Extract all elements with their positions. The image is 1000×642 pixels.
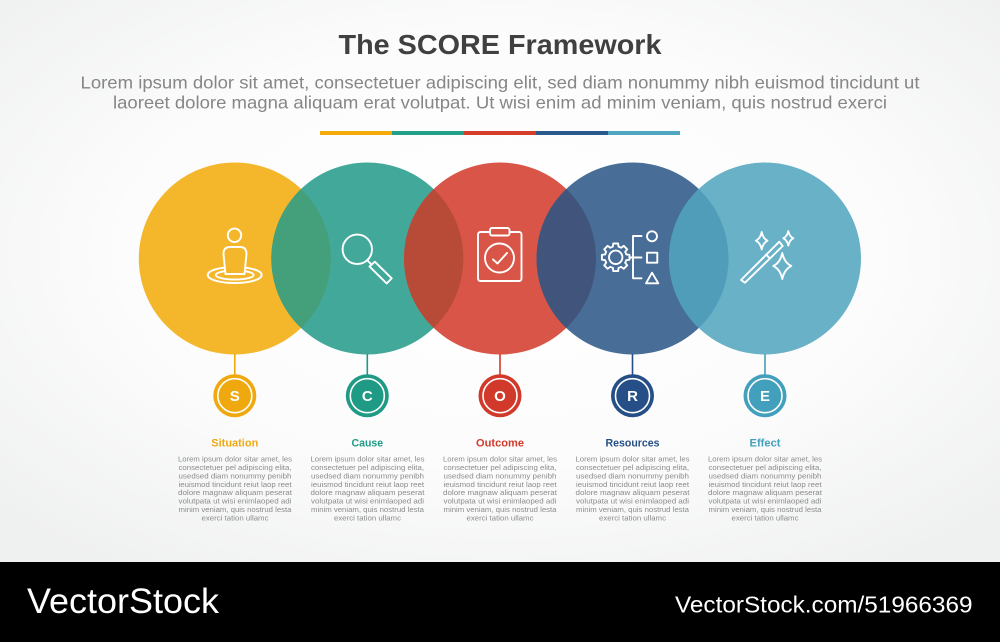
- description: exerci tation ullamc: [466, 516, 534, 523]
- badge: R: [611, 374, 654, 417]
- description: exerci tation ullamc: [732, 516, 799, 523]
- subtitle: [80, 72, 920, 112]
- description: ieuismod tincidunt reiut laop reet: [576, 482, 689, 489]
- description: exerci tation ullamc: [334, 516, 402, 523]
- description: dolore magnaw aliquam peserat: [443, 490, 557, 497]
- description: usedsed diam nonummy penibh: [576, 473, 689, 480]
- footer logo text: VectorStock: [27, 582, 220, 621]
- description: usedsed diam nonummy penibh: [708, 473, 822, 480]
- badge: C: [346, 374, 389, 417]
- description: minim veniam, quis nostrud lesta: [444, 507, 557, 514]
- overlap: Cause and Outcome: [404, 189, 464, 328]
- connector: [234, 354, 236, 376]
- description: volutpata ut wisi enimlaoped adi: [178, 499, 292, 506]
- description: exerci tation ullamc: [599, 516, 667, 523]
- large circle: Cause: [271, 162, 463, 354]
- description: [443, 456, 558, 523]
- footer image id: VectorStock.com/51966369: [675, 592, 972, 618]
- heading: Outcome: Outcome: [476, 438, 524, 450]
- description: volutpata ut wisi enimlaoped adi: [311, 499, 424, 506]
- badge: O: [478, 374, 522, 417]
- icon: magnifying glass: [343, 235, 392, 284]
- description: volutpata ut wisi enimlaoped adi: [576, 499, 689, 506]
- description: Lorem ipsum dolor sitar amet, les: [708, 456, 823, 464]
- description: usedsed diam nonummy penibh: [178, 473, 292, 480]
- description: dolore magnaw aliquam peserat: [178, 490, 292, 497]
- description: usedsed diam nonummy penibh: [311, 473, 424, 480]
- description: Lorem ipsum dolor sitar amet, les: [576, 456, 690, 464]
- badge: S: [213, 374, 256, 417]
- description: consectetuer pel adipiscing elita,: [708, 465, 822, 472]
- large circle: Resources: [536, 162, 728, 354]
- description: [310, 456, 425, 523]
- footer bar: [0, 562, 1000, 642]
- large circle: Outcome: [404, 162, 596, 354]
- panel: Cause: [271, 162, 434, 520]
- icon: gear and shapes: [602, 231, 658, 283]
- badge: R: R: [627, 388, 638, 405]
- badge: C: C: [362, 388, 373, 405]
- description: exerci tation ullamc: [202, 516, 269, 523]
- heading: Effect: Effect: [750, 438, 781, 450]
- panel: Outcome: [404, 162, 566, 520]
- heading: Resources: Resources: [606, 438, 660, 450]
- description: ieuismod tincidunt reiut laop reet: [708, 482, 822, 489]
- description: consectetuer pel adipiscing elita,: [576, 465, 689, 472]
- subtitle: laoreet dolore magna aliquam erat volutpat. Ut wisi enim ad minim veniam, quis nostrud exerci: [113, 92, 887, 112]
- description: ieuismod tincidunt reiut laop reet: [178, 482, 292, 489]
- overlap: Situation and Cause: [271, 189, 331, 328]
- panel: Resources: [536, 162, 699, 520]
- title: The SCORE Framework: [338, 29, 662, 60]
- panel: Effect: [669, 162, 861, 523]
- description: minim veniam, quis nostrud lesta: [576, 507, 689, 514]
- description: dolore magnaw aliquam peserat: [708, 490, 822, 497]
- connector: [764, 354, 766, 376]
- description: minim veniam, quis nostrud lesta: [708, 507, 822, 514]
- description: ieuismod tincidunt reiut laop reet: [444, 482, 557, 489]
- overlap: Resources and Effect: [669, 189, 728, 328]
- description: [708, 456, 823, 523]
- description: dolore magnaw aliquam peserat: [310, 490, 425, 497]
- description: Lorem ipsum dolor sitar amet, les: [178, 456, 293, 464]
- subtitle: Lorem ipsum dolor sit amet, consectetuer adipiscing elit, sed diam nonummy nibh euismod tincidunt ut: [80, 72, 920, 92]
- overlap: Outcome and Resources: [536, 189, 596, 328]
- description: Lorem ipsum dolor sitar amet, les: [310, 456, 425, 464]
- badge: E: [744, 374, 786, 417]
- colour bar: [320, 131, 680, 135]
- badge: O: O: [494, 388, 506, 405]
- description: [178, 456, 293, 523]
- badge: E: E: [760, 388, 770, 405]
- icon: person in target: [208, 229, 262, 283]
- description: consectetuer pel adipiscing elita,: [444, 465, 557, 472]
- description: consectetuer pel adipiscing elita,: [178, 465, 292, 472]
- description: consectetuer pel adipiscing elita,: [311, 465, 424, 472]
- heading: Cause: Cause: [352, 438, 383, 450]
- description: ieuismod tincidunt reiut laop reet: [311, 482, 424, 489]
- icon: magic wand and sparkles: [741, 231, 793, 283]
- panel: Situation: [139, 162, 331, 523]
- connector: [499, 354, 501, 376]
- connector: [632, 354, 633, 376]
- description: volutpata ut wisi enimlaoped adi: [708, 499, 822, 506]
- description: volutpata ut wisi enimlaoped adi: [444, 499, 557, 506]
- description: dolore magnaw aliquam peserat: [576, 490, 690, 497]
- description: minim veniam, quis nostrud lesta: [178, 507, 292, 514]
- badge: S: S: [230, 388, 240, 405]
- connector: [366, 354, 368, 376]
- icon: clipboard with check: [478, 228, 522, 281]
- description: Lorem ipsum dolor sitar amet, les: [443, 456, 558, 464]
- description: usedsed diam nonummy penibh: [444, 473, 557, 480]
- large circle: Situation: [139, 162, 331, 354]
- heading: Situation: Situation: [211, 438, 259, 450]
- large circle: Effect: [669, 162, 861, 354]
- description: [576, 456, 690, 523]
- description: minim veniam, quis nostrud lesta: [311, 507, 424, 514]
